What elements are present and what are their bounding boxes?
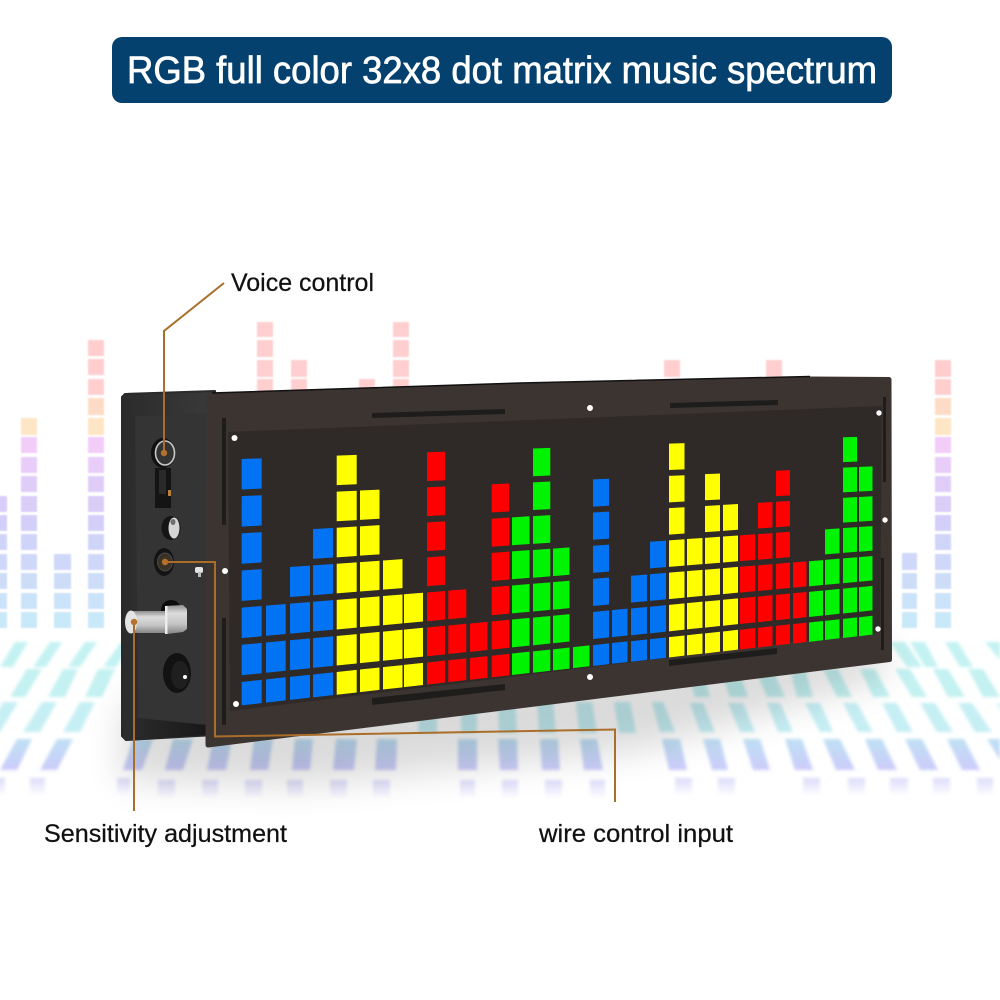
panel white screw holes	[222, 405, 888, 707]
bar column left 4	[88, 340, 104, 628]
bar column far left	[0, 496, 7, 628]
banner background	[112, 37, 892, 103]
icon: small screw	[195, 567, 203, 577]
reflection row B	[10, 669, 1000, 697]
reflection row A	[0, 642, 1000, 667]
bar column right 1	[902, 553, 917, 628]
callout: sensitivity adjustment	[44, 619, 287, 848]
icon: microphone socket	[151, 438, 175, 468]
label voice control: Voice control	[231, 269, 374, 297]
reflection row D	[0, 739, 1000, 770]
green LED columns 29-32	[809, 436, 872, 642]
bar column left 3	[54, 554, 71, 628]
label sensitivity adjustment: Sensitivity adjustment	[44, 820, 287, 848]
LED spectrum matrix	[242, 436, 872, 705]
blue LED columns 1-4	[242, 458, 333, 705]
reflection row E	[0, 778, 993, 797]
callout: wire control input	[162, 559, 733, 848]
leader line voice control	[164, 283, 224, 453]
icon: silver adjustment hole	[162, 516, 180, 540]
enclosure body	[122, 391, 215, 740]
blue LED columns 17-20	[593, 478, 666, 666]
leader line sensitivity	[133, 622, 135, 811]
reflection row C	[0, 702, 1000, 733]
green LED columns 13-16	[512, 447, 590, 675]
leader dot voice control	[161, 450, 167, 456]
icon: black switch	[155, 468, 171, 508]
label wire control input: wire control input	[538, 820, 733, 848]
bar column right 2	[935, 360, 951, 628]
red LED columns 9-12	[427, 451, 509, 685]
panel outer plate	[208, 379, 890, 745]
leader dot wire control	[162, 559, 168, 565]
bars above the board	[257, 322, 782, 395]
icon: sensitivity knob	[125, 600, 187, 634]
leader line wire control	[165, 562, 615, 802]
side enclosure of the device	[122, 391, 215, 740]
bar column left 2	[21, 418, 37, 628]
title text: RGB full color 32x8 dot matrix music spectrum	[127, 50, 877, 92]
red LED columns 25-28	[740, 470, 806, 650]
title banner	[112, 37, 892, 103]
board drop shadow on floor	[120, 640, 890, 785]
callout: voice control	[161, 269, 374, 456]
recessed connector panel	[135, 414, 207, 725]
icon: power socket	[163, 653, 191, 693]
panel inner matrix area	[228, 406, 882, 711]
panel mounting slots	[222, 397, 886, 725]
leader dot sensitivity	[131, 619, 137, 625]
lower wedge shadow	[124, 718, 207, 740]
yellow LED columns 21-24	[669, 443, 738, 657]
floor reflection of equalizer bars	[0, 642, 1000, 797]
panel top edge line	[212, 376, 810, 393]
icon: wire control jack	[154, 548, 174, 576]
front dot matrix panel	[208, 376, 890, 745]
background equalizer bars	[0, 322, 951, 628]
yellow LED columns 5-8	[337, 454, 423, 695]
